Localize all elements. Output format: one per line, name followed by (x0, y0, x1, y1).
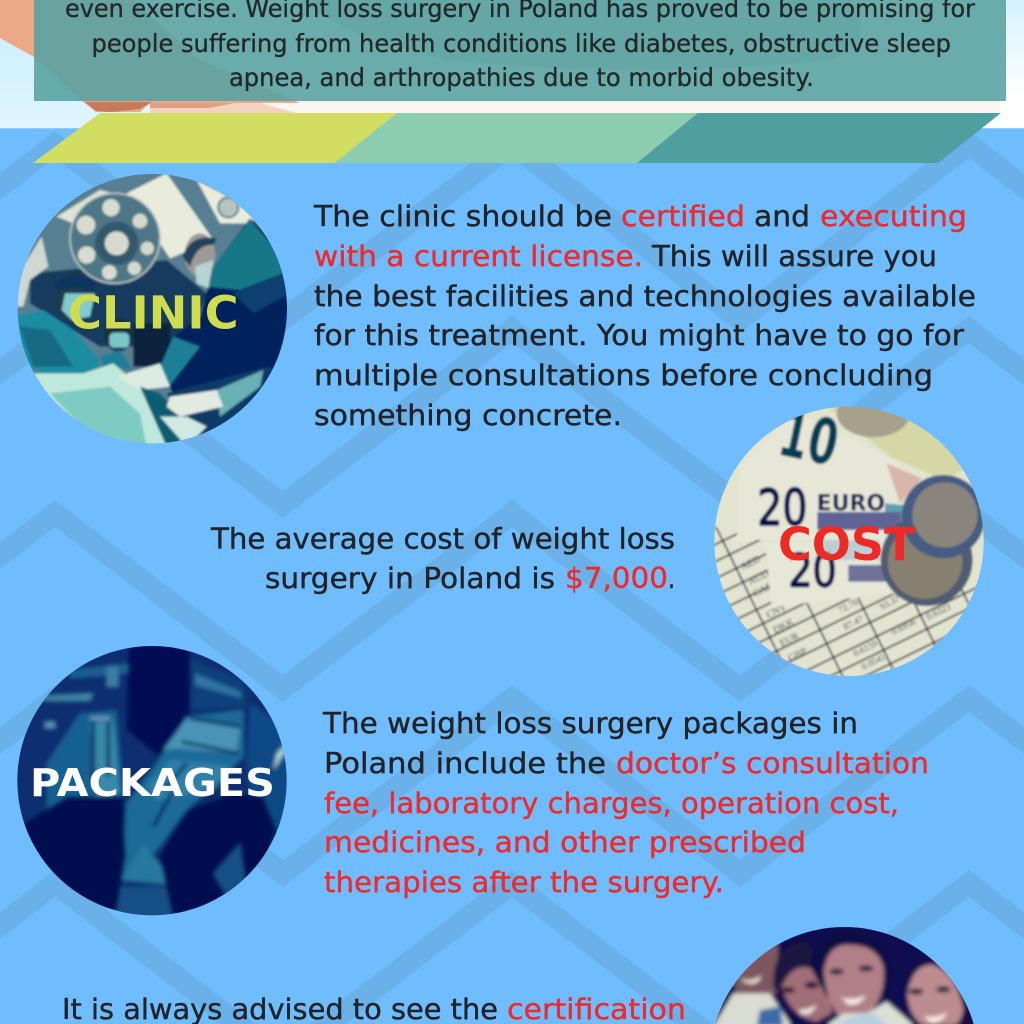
exchange rate table: 0.6159 (852, 639, 880, 659)
exchange rate table: DKK (771, 616, 796, 636)
cost paragraph (210, 522, 675, 595)
banknotes: 10 (773, 396, 845, 481)
exchange rate table (713, 527, 993, 680)
clinic paragraph: the best facilities and technologies available (314, 280, 976, 313)
intro text panel: apnea, and arthropathies due to morbid obesity. (229, 63, 814, 92)
clinic paragraph: certified (621, 200, 745, 233)
surgical lamp (70, 193, 160, 283)
woman left (773, 942, 833, 1022)
clinic paragraph: This will assure you (651, 240, 937, 273)
packages paragraph: doctor’s consultation (616, 747, 929, 780)
cost circle photo (714, 406, 984, 676)
clinic circle photo (13, 170, 293, 450)
clinic label: CLINIC (68, 286, 239, 339)
exchange rate table: GBP (786, 646, 809, 664)
exchange rate table: AED (739, 554, 762, 573)
euro coins (837, 389, 985, 606)
banknotes: 20 (757, 479, 807, 537)
packages paragraph: medicines, and other prescribed (324, 826, 806, 859)
doctor centre (810, 933, 913, 1024)
packages circle photo (13, 642, 292, 920)
packages label: PACKAGES (30, 761, 275, 805)
surgeon right (160, 218, 293, 393)
cost label: COST (778, 518, 916, 571)
cost paragraph: surgery in Poland is (265, 562, 555, 595)
header photo: patient with measuring hand (0, 0, 1024, 129)
packages paragraph: therapies after the surgery. (324, 866, 724, 899)
clinic paragraph (313, 200, 976, 432)
exchange rate table: AUD (746, 568, 771, 588)
certification paragraph (62, 993, 686, 1024)
exchange rate table: 0.0541 (860, 652, 888, 673)
clinic paragraph: for this treatment. You might have to go for (314, 319, 964, 352)
cost paragraph: . (668, 562, 675, 595)
exchange rate table: 0.6956 (890, 617, 918, 638)
exchange rate table: 72.70 (837, 598, 860, 616)
exchange rate table: CNY (765, 602, 789, 621)
banknotes: 20 (788, 545, 837, 598)
exchange rate table: 87.47 (842, 614, 865, 633)
intro text panel: people suffering from health conditions like diabetes, obstructive sleep (92, 29, 951, 58)
exchange rate table: 93.37 (879, 594, 902, 613)
clinic paragraph: something concrete. (314, 399, 622, 432)
cost paragraph: $7,000 (565, 562, 668, 595)
team circle photo (707, 923, 983, 1024)
nurse (100, 318, 133, 370)
exchange rate table: 0.6323 (925, 602, 953, 623)
surgeon left (13, 272, 100, 373)
clinic paragraph: multiple consultations before concluding (314, 359, 933, 392)
exchange rate table: CAD (751, 580, 775, 599)
banknotes: EURO (817, 492, 885, 517)
clinic paragraph: The clinic should be (313, 200, 612, 233)
cost paragraph: The average cost of weight loss (210, 522, 675, 556)
exchange rate table: EUR (778, 631, 801, 649)
packages paragraph: The weight loss surgery packages in (322, 707, 858, 740)
woman right (907, 963, 973, 1024)
clinic paragraph: with a current license. (314, 240, 643, 273)
packages paragraph: Poland include the (324, 747, 606, 780)
packages paragraph: fee, laboratory charges, operation cost, (324, 787, 899, 820)
intro text panel (34, 0, 1006, 101)
three-colour parallelogram strip (33, 113, 1001, 163)
clinic paragraph: executing (820, 200, 967, 233)
doctor far left (713, 943, 790, 1024)
patient sheet and gloves (33, 363, 287, 447)
packages paragraph (322, 707, 929, 899)
clinic paragraph: and (754, 200, 810, 233)
banknotes (737, 396, 970, 607)
